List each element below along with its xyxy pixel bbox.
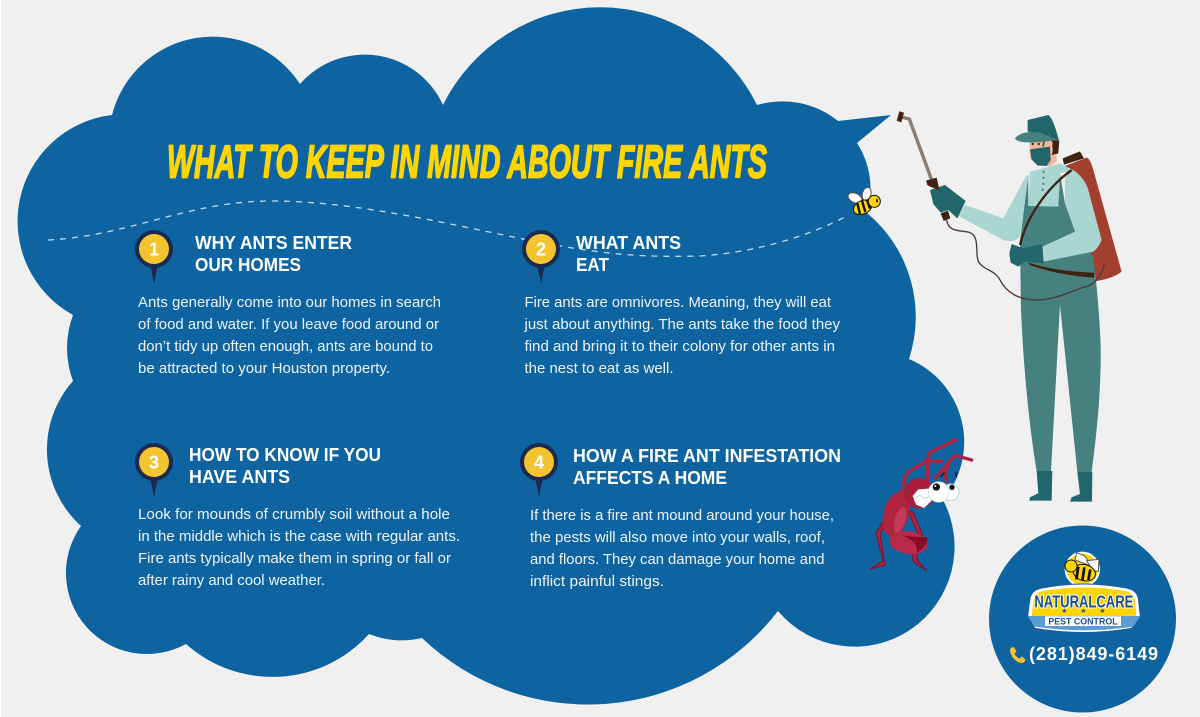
section 2: what ants eat [522, 230, 840, 377]
near arm [1043, 170, 1102, 262]
heading 1 [195, 233, 352, 275]
heading 3: HOW TO KNOW IF YOU [189, 445, 381, 465]
icon: pin 3 [135, 443, 173, 497]
text block 4: If there is a fire ant mound around your house, [530, 507, 834, 524]
text block 3: after rainy and cool weather. [138, 572, 325, 589]
boots [1029, 471, 1092, 502]
section 4: infestation [520, 443, 841, 590]
heading 2: EAT [576, 255, 609, 275]
text block 4: and floors. They can damage your home and [530, 551, 824, 568]
gloves [930, 185, 1044, 267]
text block 1: be attracted to your Houston property. [138, 360, 390, 377]
heading 3 [189, 445, 381, 487]
text block 3 [138, 506, 460, 589]
section 1: why ants enter [135, 230, 441, 377]
text block 3: in the middle which is the case with regular ants. [138, 528, 460, 545]
icon: phone [1010, 647, 1026, 663]
head [1015, 115, 1059, 166]
icon: pin 2: 2 [536, 240, 546, 260]
logo: Natural Care Pest Control: ★ [1061, 607, 1067, 615]
text block 2: Fire ants are omnivores. Meaning, they will eat [524, 294, 832, 311]
text block 4: inflict painful stings. [530, 573, 664, 590]
text block 2: find and bring it to their colony for other ants in [524, 338, 835, 355]
heading 2: WHAT ANTS [576, 233, 681, 253]
heading 1: OUR HOMES [195, 255, 301, 275]
logo: Natural Care Pest Control: ★ [1080, 607, 1086, 615]
logo: Natural Care Pest Control: PEST CONTROL [1048, 616, 1118, 626]
panel: company badge [989, 526, 1176, 712]
icon: pin 1: 1 [149, 240, 159, 260]
illustration: pest control technician [897, 111, 1122, 502]
straps [1020, 170, 1094, 278]
shirt [1028, 163, 1073, 207]
phone number: (281)849-6149 [1029, 644, 1158, 664]
icon: pin 3: 3 [149, 452, 159, 472]
overalls and legs [1020, 173, 1101, 472]
text block 4: the pests will also move into your walls, roof, [530, 529, 825, 546]
text block 2: the nest to eat as well. [524, 360, 674, 377]
icon: fire ant [870, 440, 972, 571]
heading 3: HAVE ANTS [189, 467, 290, 487]
section 3: how to know [135, 443, 460, 589]
logo: Natural Care Pest Control [1028, 553, 1140, 632]
text block 3: Fire ants typically make them in spring or fall or [138, 550, 451, 567]
text block 3: Look for mounds of crumbly soil without a hole [138, 506, 450, 523]
title: WHAT TO KEEP IN MIND ABOUT FIRE ANTS [167, 136, 767, 188]
logo: Natural Care Pest Control: NATURALCARE [1034, 591, 1133, 611]
heading 4: AFFECTS A HOME [573, 468, 727, 488]
heading 1: WHY ANTS ENTER [195, 233, 352, 253]
logo: Natural Care Pest Control: ★ [1099, 607, 1105, 615]
icon: pin 4 [520, 443, 558, 497]
dashed bee flight path [48, 201, 847, 256]
text block 2 [524, 294, 840, 377]
heading 2 [576, 233, 681, 275]
backpack [1063, 151, 1122, 281]
icon: pin 1 [135, 230, 173, 284]
heading 4: HOW A FIRE ANT INFESTATION [573, 446, 841, 466]
text block 1: of food and water. If you leave food around or [138, 316, 439, 333]
hose [947, 220, 1104, 300]
text block 1: Ants generally come into our homes in search [138, 294, 441, 311]
heading 4 [573, 446, 841, 488]
text block 1 [138, 294, 441, 377]
text block 4 [530, 507, 834, 590]
text block 1: don’t tidy up often enough, ants are bound to [138, 338, 433, 355]
icon: bee [846, 186, 880, 217]
panel: speech cloud [18, 7, 964, 705]
text block 2: just about anything. The ants take the food they [524, 316, 840, 333]
icon: pin 4: 4 [534, 452, 544, 472]
icon: pin 2 [522, 230, 560, 284]
spray wand [897, 111, 950, 221]
raised arm [958, 175, 1028, 241]
